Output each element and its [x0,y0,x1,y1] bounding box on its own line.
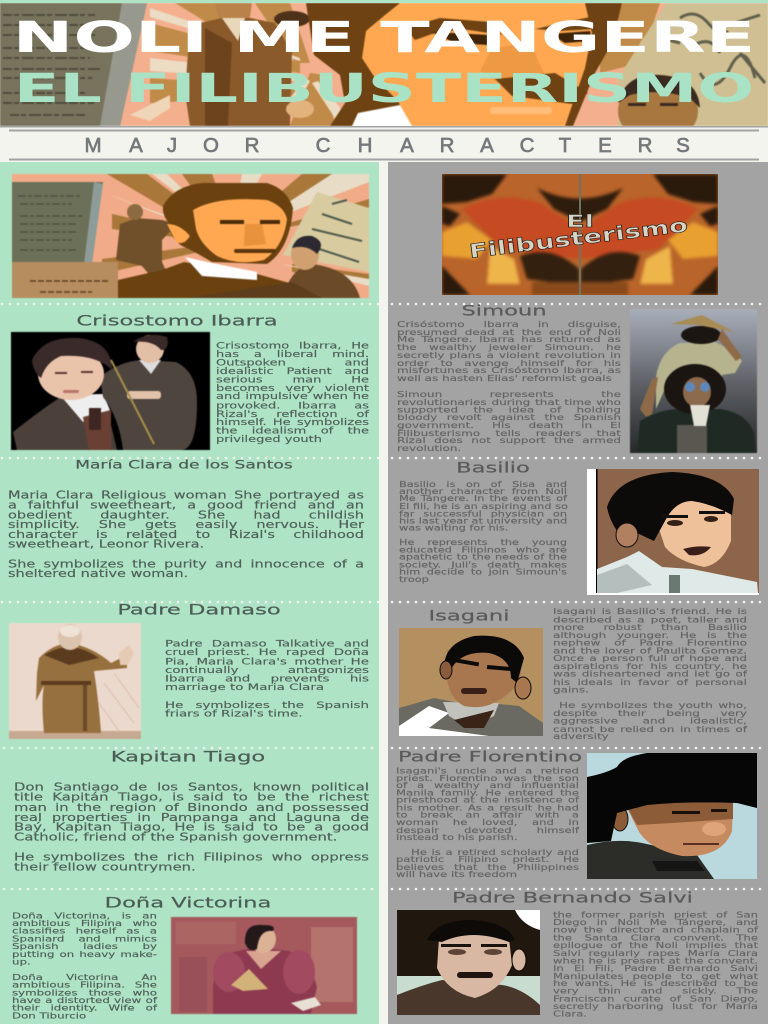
banner [0,3,768,126]
text: Padre Florentino description: Manila family. He entered the [396,788,579,798]
image: Basilio portrait [587,469,759,595]
text: Padre Salvi description: secretly harboring lust for María [553,1001,758,1011]
text: Dona Victorina description [12,911,158,1021]
text: Dona Victorina description: putting on heavy make- [12,949,157,959]
text: Basilio description: He represents the young [399,538,567,547]
text: Simoun description: supported the idea of holding [397,405,621,415]
text: Ibarra description: Rizal's reflection of [216,409,369,419]
text: Isagani description: although younger. He is the [553,630,747,640]
writing man [283,264,360,298]
text: Isagani description: nephew of Padre Florentino [553,638,747,647]
text: Kapitan Tiago description: their fellow countrymen. [14,862,196,874]
text: Padre Florentino description: priest. Florentino was the son [396,773,579,783]
text: Padre Salvi description: the former parish priest of San [553,909,758,919]
text: Kapitan Tiago description: Baý, Kapitan Tiago, He is said to be a good [14,822,369,834]
panel: Noli Me Tangere characters [0,162,379,1024]
text: Simoun description: bloody revolt against the Spanish [397,413,621,422]
text: Dona Victorina description: have a distorted view of [12,995,157,1005]
text: Padre Damaso description: continually antagonizes [165,665,369,675]
text: Simoun description: presumed dead at the end of Noli [397,328,621,337]
text: Isagani description: despite their being very [553,708,747,718]
suit [118,262,293,298]
title: Noli Me Tangere: NOLI ME TANGERE [13,13,755,63]
text: Kapitan Tiago description [14,782,369,874]
text: Ibarra description: Crisostomo Ibarra, He [216,341,369,351]
image: Padre Florentino portrait [587,753,757,879]
text: Padre Florentino description: Isagani's uncle and a retired [396,766,579,775]
text: Padre Salvi description [553,909,758,1018]
text: Ibarra description: provoked. Ibarra as [216,401,369,410]
section: cover image [442,174,718,295]
text: Ibarra description: privileged youth [216,435,322,444]
heading: Crisostomo Ibarra: Crisostomo Ibarra [76,313,278,329]
text: Maria Clara description: simplicity. She gets easily nervous. Her [8,520,364,531]
text: Padre Salvi description: the Santa Clara convent. The [553,932,758,942]
image: El Filibusterismo cover [442,174,718,295]
text: Basilio description: was waiting for his. [399,523,508,533]
text: Dona Victorina description: up. [12,957,31,967]
heading: Dona Victorina: Doña Victorina [105,895,271,911]
text: Simoun description: Filibusterismo tells readers that [397,428,621,438]
text: Maria Clara description [8,490,364,580]
text: Padre Florentino description: will have its freedom [396,869,517,879]
text: Isagani description: Isagani is Basilio's friend. He is [553,606,747,616]
text: Padre Salvi description: Manipulates people to get what [553,970,758,980]
image: Padre Damaso figure [8,622,142,740]
text: Dona Victorina description: symbolizes those who [12,988,157,997]
text: Simoun description: Me Tángere. Ibarra has returned as [397,335,621,344]
heading: Padre Damaso: Padre Damaso [117,602,281,618]
small figure [116,218,177,290]
text: Isagani description: cannot be relied on in times of [553,724,747,733]
text: Padre Salvi description: when he is present at the convent. [553,955,758,965]
manuscript [12,182,103,263]
text: Simoun description: Simoun represents the [397,390,621,399]
section: Padre Damaso [8,602,369,740]
image: Isagani portrait [399,628,543,736]
text: Padre Florentino description: of a wealthy and influential [396,780,579,790]
heading: Maria Clara de los Santos: María Clara de los Santos [75,458,293,472]
text: Padre Florentino description: priesthood at the insistence of [396,795,579,805]
text: Isagani description: aggressive and idealistic, [553,716,747,726]
text: Ibarra description: idealistic Patient and [216,367,369,376]
small man face [618,79,698,143]
panel: El Filibusterismo characters [388,162,768,1024]
heading: Simoun: Simoun [461,303,547,319]
text: Isagani description: He symbolizes the youth who, [559,700,747,710]
text: Padre Florentino description: woman he loved, and in [396,817,579,827]
text: Padre Florentino description: instead to his parish. [396,832,518,842]
text: Simoun description: misfortunes as Crisóstomo Ibarra, as [397,366,621,375]
text: Simoun description: revolution. [397,444,461,453]
text: Padre Salvi description: very thin and sickly. The [553,986,758,995]
image: Dona Victorina portrait [170,916,358,1015]
text: Padre Florentino description: believes that the Philippines [396,862,579,872]
big face [550,3,622,126]
text: Padre Salvi description: In El Fili, Padre Bernardo Salvi [553,963,758,972]
text: Simoun description: Rizal does not support the armed [397,436,621,445]
text: Padre Salvi description: Clara. [553,1009,587,1018]
text: Basilio description: far successful physician on [399,509,567,518]
text: Ibarra description [216,341,370,444]
text: Isagani description: gains. [553,685,589,694]
section: Dona Victorina [12,895,358,1021]
top mint strip [0,0,768,3]
text: Maria Clara description: sweetheart, Leonor Rivera. [8,539,204,551]
text: Padre Damaso description: Ibarra and prevents his [165,674,369,684]
heading: Padre Bernando Salvi: Padre Bernando Salvi [452,890,693,906]
text: Kapitan Tiago description: Don Santiago de los Santos, known political [14,782,369,794]
heading: Kapitan Tiago: Kapitan Tiago [111,749,265,765]
text: Dona Victorina description: ambitious Filipina who [12,918,157,928]
heading: Padre Florentino: Padre Florentino [398,749,582,765]
text: Simoun description [397,320,621,453]
text: Kapitan Tiago description: He symbolizes the rich Filipinos who oppress [14,852,369,864]
heading: Isagani: Isagani [428,608,510,624]
subtitle band: major characters: MAJORCHARACTERS [84,134,690,157]
text: Ibarra description: and impulsive when he [216,392,369,402]
text: Padre Florentino description [396,766,580,879]
text: Basilio description: him decide to join Simoun's [399,567,567,576]
image: El Filibusterismo cover: El [566,212,594,232]
text: Basilio description: Me Tángere. In the events of [399,494,567,503]
section: Basilio [399,460,759,595]
text: Maria Clara description: Maria Clara Religious woman She portrayed as [8,490,364,501]
manuscript left [0,3,147,126]
text: Isagani description: his ideals in favor of personal [553,677,747,687]
text: Maria Clara description: sheltered native woman. [8,568,188,580]
text: Ibarra description: Outspoken and [216,358,369,368]
text: Simoun description: secretly plans a violent revolution in [397,351,621,360]
image: Ibarra portrait [10,331,211,451]
text: Dona Victorina description: Don Tiburcio [12,1011,86,1021]
right paper [618,3,768,126]
text: Padre Florentino description: despair devoted himself [396,825,579,835]
text: Padre Damaso description: Pia, Maria Clara's mother He [165,657,369,667]
text: Basilio description: educated Filipinos who are [399,545,567,554]
text: Ibarra description: becomes very violent [216,384,369,393]
section: Kapitan Tiago [14,749,369,874]
text: Simoun description: order to avenge himself for his [397,358,621,368]
text: Simoun description: government. His death in El [397,421,621,430]
text: Simoun description: well as hasten Elias' reformist goals [397,374,612,383]
text: Padre Florentino description: patriotic Filipino priest. He [396,855,579,864]
text: Ibarra description: has a liberal mind. [216,350,369,359]
text: Kapitan Tiago description: real properties in Pampanga and Laguna de [14,812,369,824]
paper [283,192,369,272]
text: Maria Clara description: She symbolizes the purity and innocence of a [8,559,364,570]
text: Kapitan Tiago description: man in the region of Binondo and possessed [14,802,369,814]
text: Isagani description: aspirations for his country, he [553,661,747,671]
section: Simoun [397,303,758,454]
text: Dona Victorina description: classifies herself as a [12,926,157,936]
text: Ibarra description: himself. He symbolizes [216,418,369,427]
text: Basilio description: society. Juli's death makes [399,560,567,569]
text: Basilio description: troop [399,574,429,584]
text: Padre Florentino description: to break an affair with a [396,810,579,820]
banner collage artwork [0,3,768,126]
text: Isagani description: more robust than Basilio [553,622,747,632]
text: Dona Victorina description: ambitious Filipina. She [12,980,157,990]
text: Padre Salvi description: Diego in Noli Me Tángere, and [553,917,758,927]
text: Maria Clara description: obedient daughter. She had childish [8,510,364,521]
title: El Filibusterismo: EL FILIBUSTERISMO [14,65,754,111]
text: Simoun description: the wealthy jeweler Simoun. he [397,343,621,352]
text: Dona Victorina description: Spanish ladies by [12,942,157,951]
text: Maria Clara description: a faithful sweetheart, a good friend and an [8,500,364,511]
section: Padre Bernando Salvi [397,890,758,1018]
text: Basilio description: another character from Noli [399,486,567,496]
text: Maria Clara description: character is related to Rizal's childhood [8,530,364,541]
text: Isagani description [553,606,748,741]
text: Padre Damaso description: He symbolizes the Spanish [165,701,369,711]
text: Padre Damaso description: Padre Damaso Talkative and [165,639,369,649]
section: Maria Clara [8,458,364,580]
text: Dona Victorina description: Spaniard and mimics [12,934,157,944]
text: Isagani description: and the lover of Paulita Gomez. [553,646,747,655]
standing figure [185,15,292,126]
text: Padre Salvi description: epilogue of the Noli implies that [553,940,758,950]
text: Kapitan Tiago description: title Kapitán Tiago, is said to be the richest [14,792,369,804]
text: Basilio description: El fili, he is an aspiring and so [399,501,568,511]
text: Padre Florentino description: He is a retired scholarly and [411,847,579,857]
text: Padre Damaso description: friars of Rizal's time. [165,709,302,719]
text: Isagani description: described as a poet, taller and [553,614,747,624]
text: Basilio description [399,479,568,584]
text: Basilio description: his last year at university and [399,516,567,525]
image: Padre Salvi portrait [397,910,540,1015]
text: Simoun description: Crisóstomo Ibarra in disguise, [397,320,621,329]
text: Simoun description: revolutionaries during that time who [397,398,621,407]
text: Padre Damaso description [165,639,369,719]
text: Basilio description: Basilio is on of Sisa and [399,479,567,489]
text: Dona Victorina description: their identity. Wife of [12,1003,157,1013]
image: El Filibusterismo cover: Filibusterismo [468,214,689,263]
text: Dona Victorina description: Doña Victorina An [12,972,157,982]
text: Padre Damaso description: cruel priest. He raped Doña [165,648,369,658]
section: Padre Florentino [396,749,757,879]
text: Ibarra description: serious man He [216,375,369,385]
text: Dona Victorina description: Doña Victorina, is an [12,911,157,921]
section: hero image [11,173,370,299]
text: Padre Damaso description: marriage to Maria Clara [165,683,324,693]
text: Ibarra description: the idealism of the [216,426,369,436]
text: Padre Salvi description: he wants. He is described to be [553,978,758,988]
section: Crisostomo Ibarra [10,313,370,451]
text: Isagani description: was disheartened and let go of [553,669,747,679]
image: Rizal collage [11,173,370,299]
text: Kapitan Tiago description: Catholic, friend of the Spanish government. [14,832,337,844]
text: Padre Salvi description: Franciscan curate of San Diego, [553,993,758,1003]
text: Isagani description: adversity [553,732,609,741]
heading: Basilio: Basilio [456,460,530,476]
text: Basilio description: apathetic to the needs of the [399,552,567,562]
text: Padre Florentino description: his mother. As a result he had [396,803,579,812]
head [163,183,293,264]
text: Padre Salvi description: Salvi regularly rapes María Clara [553,947,758,957]
section: Isagani [399,606,748,741]
text: Padre Salvi description: now the director and chaplain of [553,924,758,934]
image: Simoun and Crisostomo [629,309,758,454]
text: Isagani description: Once a person full of hope and [553,654,747,663]
